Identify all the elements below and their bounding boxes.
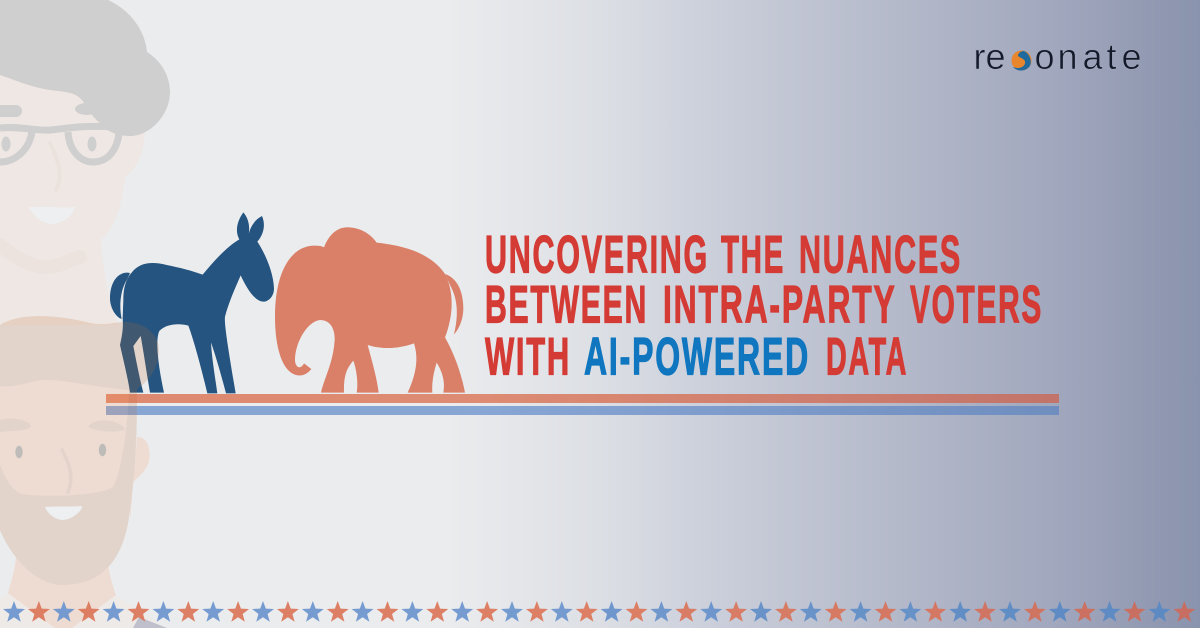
- headline: AI-POWERED: [584, 328, 810, 386]
- illustration: bearded man: [0, 316, 167, 628]
- headline: INTRA-PARTY: [663, 276, 896, 334]
- illustration: man with glasses: [0, 0, 170, 325]
- row of stars: [3, 601, 1195, 622]
- red stripe: [106, 394, 1059, 403]
- logo: resonate: resonate: [974, 36, 1142, 77]
- headline: [485, 226, 1043, 386]
- blue stripe: [106, 406, 1059, 415]
- headline: DATA: [826, 328, 908, 386]
- headline: BETWEEN: [485, 276, 648, 334]
- icon: elephant: [275, 227, 465, 393]
- headline: VOTERS: [910, 276, 1043, 334]
- headline: UNCOVERING: [485, 226, 709, 284]
- headline: THE: [721, 226, 785, 284]
- icon: donkey: [110, 212, 274, 393]
- headline: NUANCES: [799, 226, 962, 284]
- headline: WITH: [485, 328, 571, 386]
